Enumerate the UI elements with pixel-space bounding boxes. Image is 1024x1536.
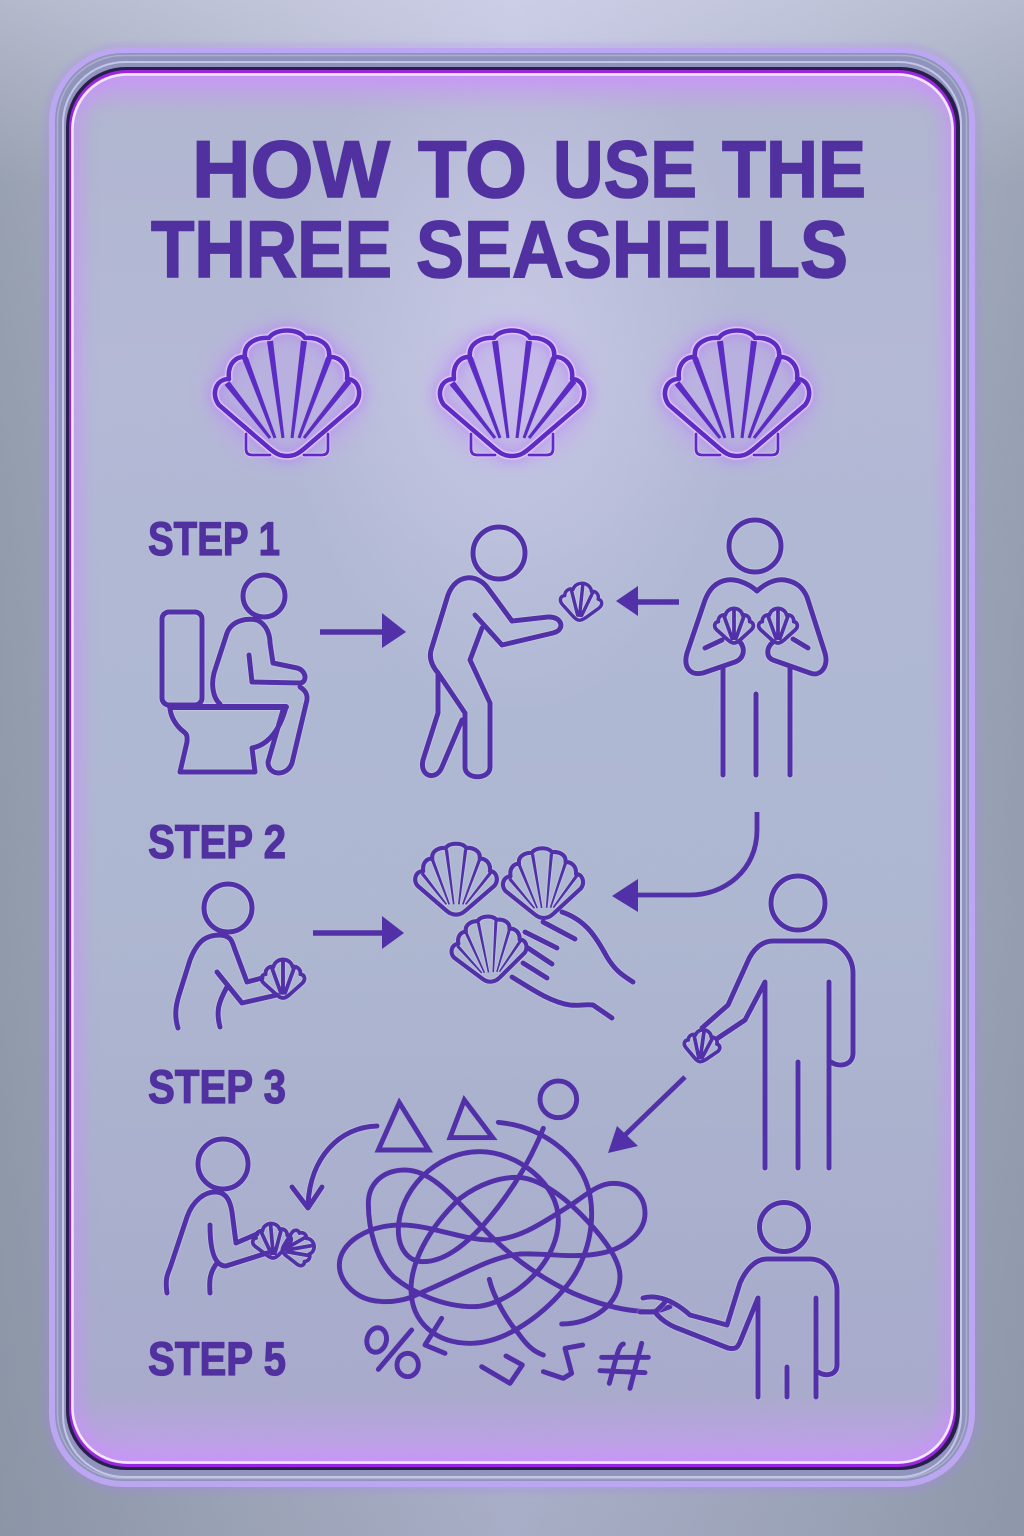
title: TO bbox=[418, 125, 527, 215]
icon: small shell bbox=[558, 581, 604, 622]
panel: inner plate with purple glow bbox=[71, 73, 954, 1464]
title: SEASHELLS bbox=[416, 205, 848, 295]
icon: person holding fanned shells bbox=[166, 1139, 317, 1293]
title: THE bbox=[722, 125, 866, 215]
title bbox=[151, 125, 866, 295]
heading: step 3: STEP 3 bbox=[148, 1060, 286, 1113]
three glowing seashells bbox=[203, 319, 821, 467]
icon: seashell 2 bbox=[428, 319, 596, 467]
title: USE bbox=[553, 125, 697, 215]
icon: person reaching for shell bbox=[422, 527, 561, 777]
heading: step 2: STEP 2 bbox=[148, 815, 286, 868]
title: HOW bbox=[192, 125, 391, 215]
icon: standing person dropping shell bbox=[682, 876, 853, 1168]
arrow: diagonal to tangle bbox=[608, 1077, 685, 1153]
icon: seashell 3 bbox=[653, 319, 821, 467]
arrow: towards small shell bbox=[616, 586, 679, 616]
icon: person on toilet bbox=[162, 575, 307, 773]
heading: step 5: STEP 5 bbox=[148, 1332, 286, 1385]
arrow: curved, tangle back to person bbox=[292, 1126, 377, 1208]
heading: step 1: STEP 1 bbox=[148, 512, 280, 565]
arrow: person to shell group bbox=[313, 916, 404, 949]
icon: person holding two shells bbox=[686, 520, 826, 775]
arrow: toilet to person bbox=[320, 613, 406, 648]
icon: three shells with hands bbox=[415, 844, 633, 1018]
icon: seashell 1 bbox=[203, 319, 371, 467]
icon: person pulling the tangle bbox=[640, 1202, 837, 1397]
icon: person holding shell bbox=[176, 884, 304, 1028]
icon: tangled scribble with shapes and symbols bbox=[339, 1081, 670, 1388]
arrow: curved, down to shell group bbox=[612, 812, 757, 912]
title: THREE bbox=[151, 205, 392, 295]
